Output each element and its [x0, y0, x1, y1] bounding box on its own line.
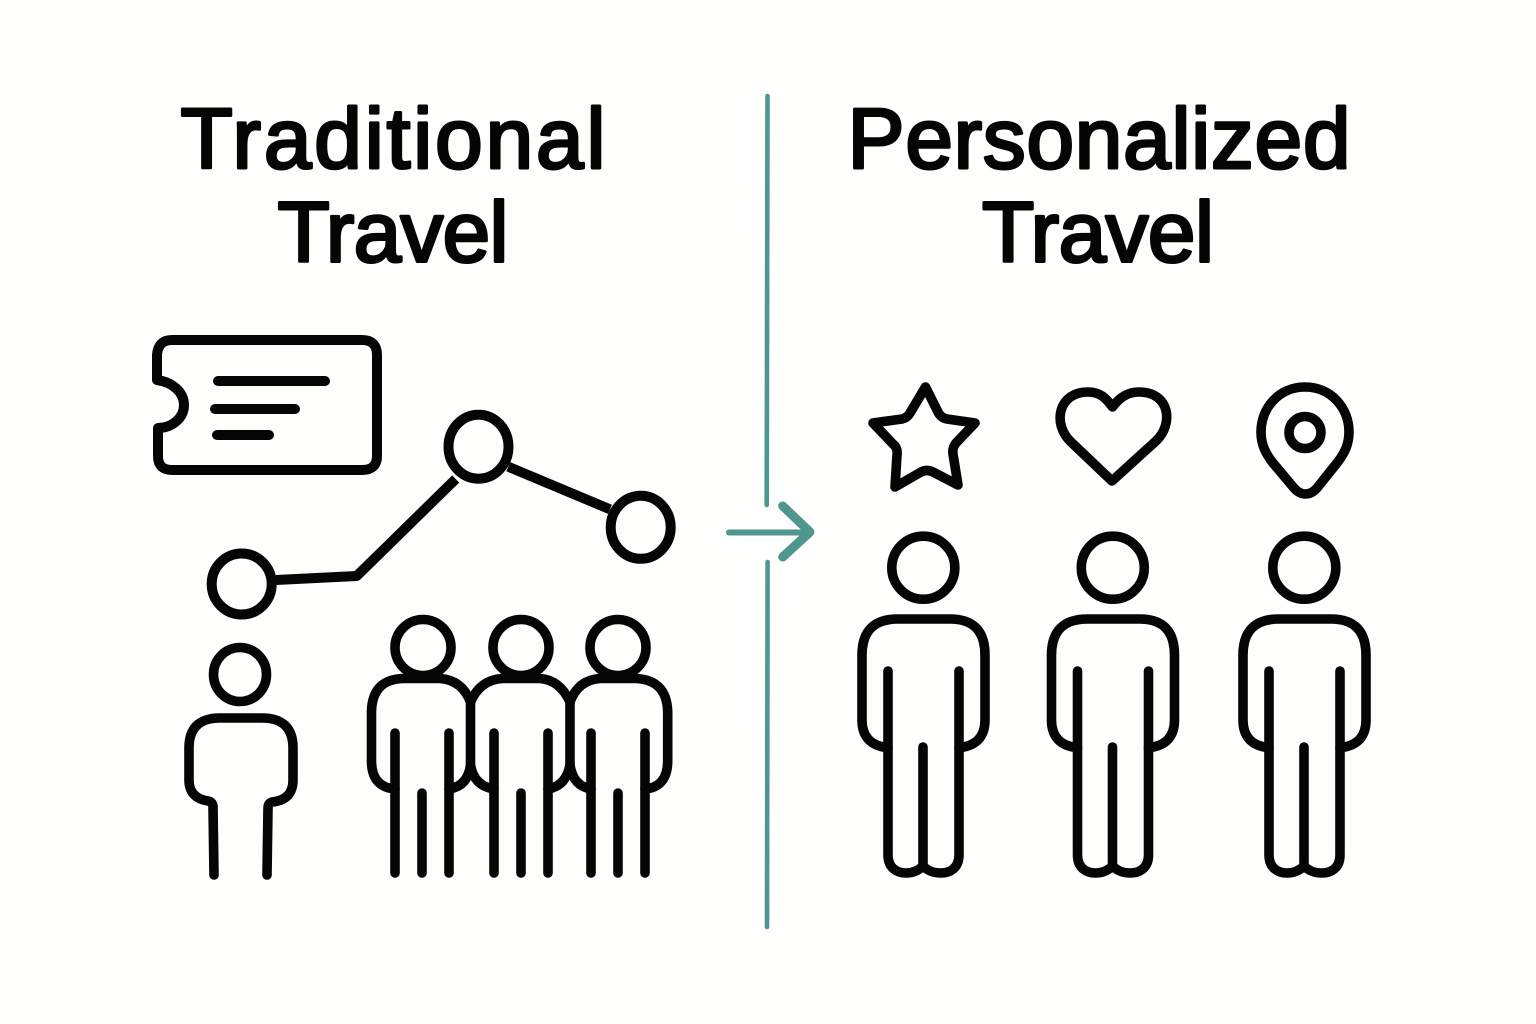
icon: star: [873, 387, 975, 487]
group person 1: [372, 620, 470, 873]
icon: route with stops: [212, 415, 671, 614]
group person 3: [570, 620, 668, 873]
icon: ticket: [157, 340, 377, 470]
heading: Traditional Travel: Travel: [278, 186, 508, 280]
arrow: [729, 506, 810, 557]
person 1: star traveller: [862, 536, 985, 873]
icon: solo traveller: [189, 648, 293, 875]
heading: Traditional Travel: Traditional: [180, 92, 606, 187]
icon: location pin: [1261, 387, 1349, 494]
person 3: location traveller: [1243, 536, 1366, 873]
icon: heart: [1060, 392, 1167, 481]
heading: Personalized Travel: Personalized: [848, 92, 1350, 187]
heading: Traditional Travel: [180, 92, 606, 280]
person 2: heart traveller: [1052, 536, 1174, 873]
divider line: [764, 96, 770, 927]
heading: Personalized Travel: [848, 92, 1350, 280]
icon: tour group: [372, 620, 668, 873]
heading: Personalized Travel: Travel: [982, 186, 1214, 280]
group person 2: [470, 620, 570, 873]
